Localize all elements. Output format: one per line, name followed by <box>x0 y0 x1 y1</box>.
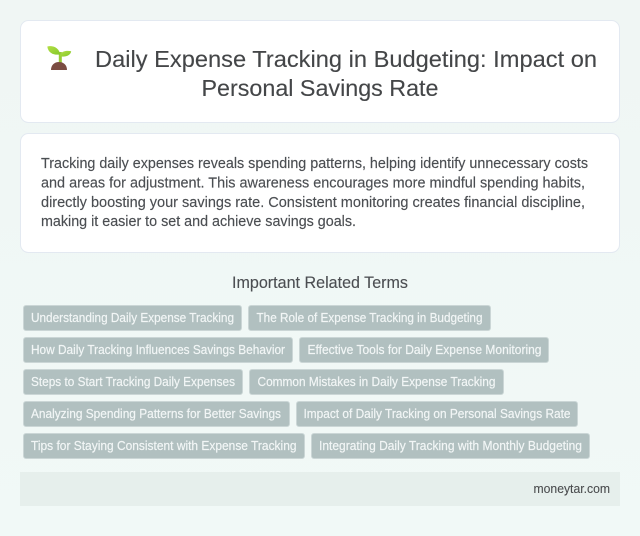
text block: summary: making it easier to set and achieve savings goals. <box>41 214 356 230</box>
tag: How Daily Tracking Influences Savings Behavior <box>31 342 286 357</box>
tag <box>24 338 292 362</box>
tag: Impact of Daily Tracking on Personal Savings Rate <box>304 406 570 421</box>
footer source text: moneytar.com <box>534 481 610 496</box>
text block: summary: and areas for adjustment. This awareness encourages more mindful spending habits, <box>41 176 585 192</box>
title <box>95 46 597 101</box>
text block: summary <box>41 156 588 230</box>
tag <box>248 306 490 330</box>
tag: Steps to Start Tracking Daily Expenses <box>31 374 235 389</box>
tag <box>24 402 290 426</box>
tag <box>250 370 504 394</box>
text block: summary: Tracking daily expenses reveals spending patterns, helping identify unnecessary costs <box>41 156 588 172</box>
panel: summary card <box>20 134 620 252</box>
tag: Common Mistakes in Daily Expense Tracking <box>258 374 496 389</box>
tag: Understanding Daily Expense Tracking <box>31 310 234 325</box>
panel: title card <box>20 20 620 122</box>
tag <box>296 402 578 426</box>
footer <box>20 472 620 506</box>
tag <box>300 338 548 362</box>
tag: Effective Tools for Daily Expense Monitoring <box>308 342 542 357</box>
title: Daily Expense Tracking in Budgeting: Impact on <box>95 46 597 72</box>
tag: Tips for Staying Consistent with Expense Tracking <box>31 438 296 453</box>
icon: seedling <box>47 46 71 70</box>
tag <box>24 370 242 394</box>
tag <box>24 434 304 458</box>
tag <box>312 434 590 458</box>
heading: related terms: Important Related Terms <box>232 274 408 292</box>
tag: Integrating Daily Tracking with Monthly Budgeting <box>319 438 582 453</box>
tag <box>24 306 242 330</box>
panel: related term tags <box>24 306 590 458</box>
title: Personal Savings Rate <box>202 75 438 101</box>
text block: summary: directly boosting your savings rate. Consistent monitoring creates financial discipline, <box>41 195 585 211</box>
tag: Analyzing Spending Patterns for Better Savings <box>31 406 281 421</box>
tag: The Role of Expense Tracking in Budgeting <box>256 310 482 325</box>
